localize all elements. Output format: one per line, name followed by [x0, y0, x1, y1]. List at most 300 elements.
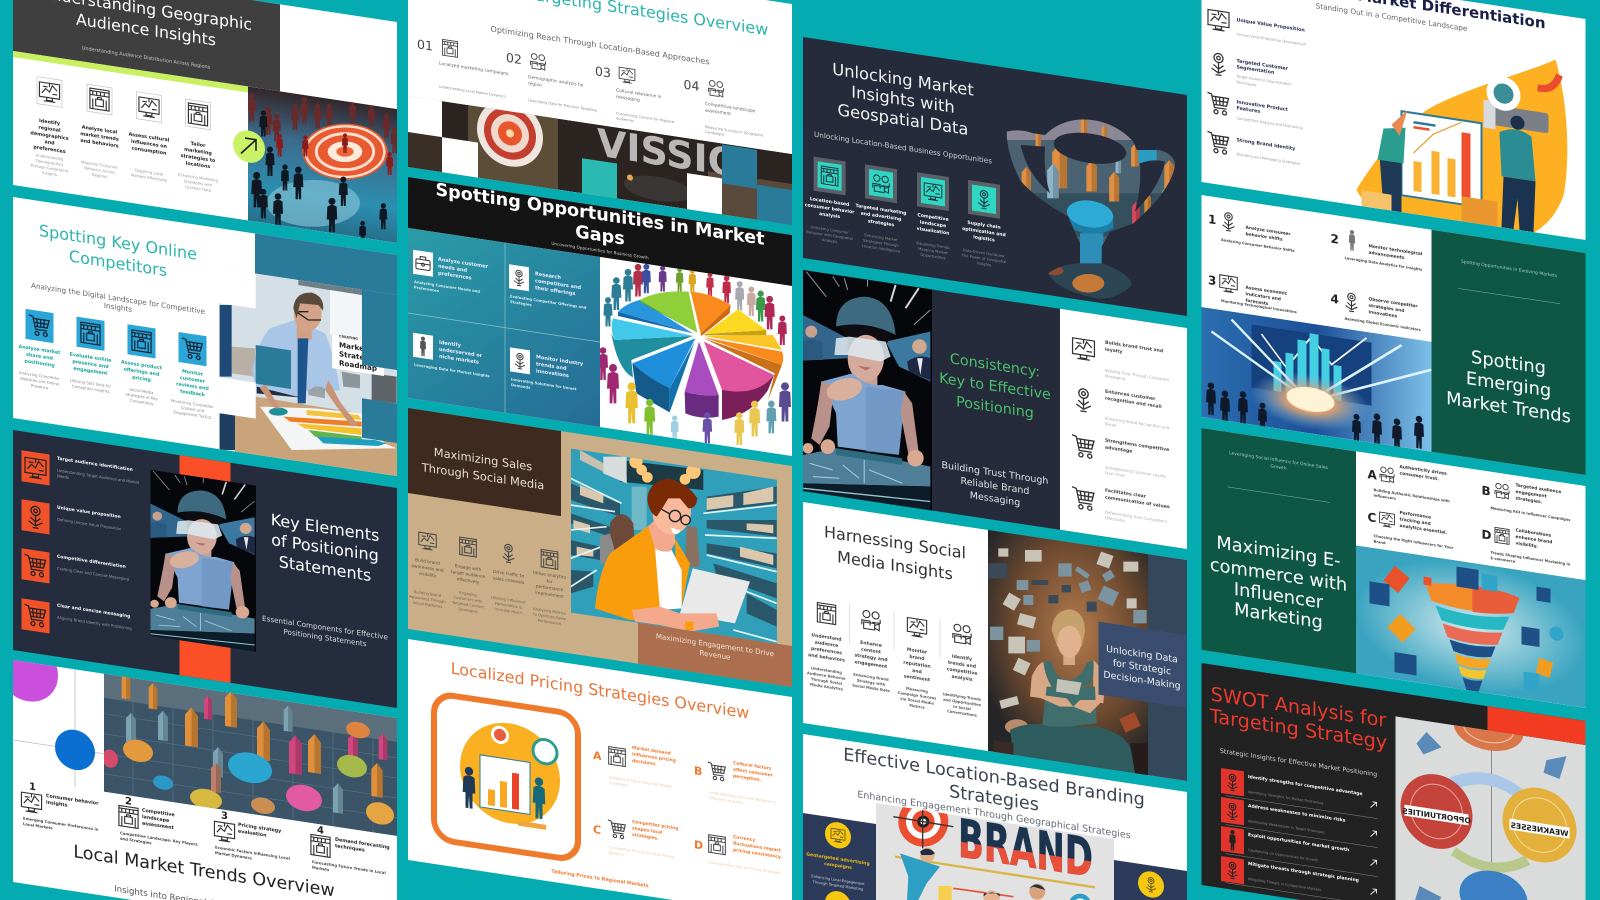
image: SWOT diagram: OPPORTUNITIES — [1402, 806, 1471, 826]
item 4: communication of values — [1105, 495, 1170, 510]
column 3: pricing — [132, 375, 151, 383]
column 3: Drive traffic to — [493, 569, 524, 580]
item B — [694, 754, 776, 810]
item 2: Monitor technological — [1368, 243, 1423, 257]
item 2 — [1221, 797, 1378, 848]
item 4: Facilitates clear — [1105, 488, 1147, 500]
title: Effective Location-Based Branding — [843, 745, 1145, 811]
column 2: Enhancing Brand — [853, 673, 889, 682]
column 1: Websites and Online — [20, 376, 60, 387]
cell 3: niche markets — [439, 354, 479, 366]
item 1: Identify strengths for competitive advantage — [1248, 774, 1363, 797]
column 4: Content and — [181, 405, 205, 413]
item D — [1482, 522, 1571, 572]
slide: Maximizing E-commerce with Influencer Marketing — [1202, 428, 1586, 708]
title: Media Insights — [837, 547, 953, 584]
cell 1: Analyzing Consumer Needs and — [414, 280, 480, 294]
item 1 — [1073, 335, 1169, 388]
column 1 — [807, 601, 846, 692]
item A — [1368, 459, 1450, 509]
item 4: Clear and concise messaging — [57, 603, 130, 620]
item A: Influencers — [1374, 493, 1396, 501]
title: Through Social Media — [421, 460, 544, 493]
item 2: Targeted Customer — [1236, 58, 1289, 72]
item C: C — [593, 823, 601, 837]
item 3: Monitoring Technological Innovations — [1221, 299, 1297, 314]
item 3: Exploit opportunities for market growth — [1248, 832, 1349, 853]
column 3: sentiment — [904, 673, 931, 683]
column 2: content — [861, 647, 882, 656]
item D: Collaborations — [1516, 527, 1552, 539]
column 4: for — [547, 578, 553, 585]
item 3: evaluation — [238, 828, 267, 839]
column 1: share and — [26, 352, 53, 362]
column 4: Strategies with — [184, 178, 213, 188]
column 2: Behavior Across — [84, 165, 115, 175]
item 3: Over Time — [1105, 470, 1125, 478]
slide: Geographic Targeting Strategies Overview — [408, 0, 792, 225]
item 03: messaging — [616, 94, 640, 104]
item A: Authenticity drives — [1400, 464, 1447, 477]
cell 3: Identify — [439, 340, 462, 349]
image: crowd around target — [248, 86, 397, 243]
column 3: Targeting Local — [134, 167, 163, 177]
column 1: Analyzing Competitor — [19, 370, 60, 381]
item 4: Strong Brand Identity — [1236, 137, 1296, 152]
column 2: and behaviors — [80, 138, 119, 150]
item B: affect consumer — [733, 767, 774, 779]
cell 4: Monitor industry — [536, 354, 584, 368]
column 3 — [129, 90, 170, 183]
item D: Currency — [733, 834, 755, 843]
item B: B — [1482, 483, 1491, 499]
item 3: Strengthens competitive — [1105, 438, 1169, 453]
slide: Strategies to Market Differentiation — [1202, 0, 1586, 240]
item 04: 04 — [684, 77, 699, 94]
panel: four cells — [408, 228, 600, 427]
cell 4 — [510, 347, 584, 398]
column 2: Strategies Through — [863, 239, 899, 248]
item 1: 1 — [29, 781, 36, 793]
column 3: and — [912, 668, 922, 675]
image: colored bars on circuit board — [104, 674, 397, 836]
image: woman with helmet — [800, 243, 935, 537]
item 4: Markets — [312, 865, 330, 872]
item 4: 4 — [317, 825, 324, 837]
column 2 — [70, 316, 112, 394]
column 4 — [961, 179, 1006, 270]
column 3: Increase Reach — [495, 607, 523, 615]
column 4: marketing — [184, 147, 212, 157]
cell 3: underserved or — [439, 347, 483, 359]
right item — [1121, 867, 1182, 900]
item 01 — [417, 35, 509, 99]
column 4: locations — [186, 161, 210, 170]
slide: Understanding Geographic Audience Insights — [13, 0, 399, 267]
item 2 — [22, 499, 122, 545]
green panel — [1202, 428, 1356, 673]
item 2: Competitive — [142, 808, 175, 819]
green panel: Marketing — [1234, 599, 1323, 633]
item C — [1368, 505, 1454, 556]
item 1: Local Markets — [23, 821, 53, 831]
item 1: Analyzing Consumer Behavior Shifts — [1221, 238, 1295, 253]
item D: D — [1482, 527, 1491, 543]
brand wordmark — [960, 818, 1092, 875]
column 4: Identify — [952, 654, 972, 663]
left item: Enhancing Local Engagement — [811, 874, 865, 886]
title: Key Elements — [271, 510, 379, 545]
cell 2 — [509, 264, 587, 315]
item 03: Audiences — [616, 116, 634, 123]
column 4: The Power of Geospatial — [961, 253, 1006, 264]
item 3: Market Dynamics — [215, 850, 253, 861]
item A: consumer trust. — [1400, 470, 1439, 482]
column 3: reputation — [903, 660, 931, 670]
column 4: competitive — [947, 666, 977, 677]
item 01: Localized marketing campaigns — [439, 61, 509, 77]
callout box: for Strategic — [1113, 658, 1171, 678]
title: Audience Insights — [76, 10, 216, 50]
column 1: Behavior with Geospatial — [806, 230, 853, 241]
column 4: Supply chain — [967, 220, 1001, 231]
title: Local Market Trends Overview — [73, 842, 335, 900]
column 2: engagement — [74, 366, 108, 377]
column 2: Engage with — [455, 563, 482, 573]
item 2: Leveraging Data Analytics for Insights — [1344, 256, 1422, 272]
green panel — [1432, 230, 1586, 475]
item 3: advantage — [1105, 445, 1132, 455]
item 1: Analyze consumer — [1246, 225, 1291, 238]
item 2: Addressing Weaknesses in Target Strategies — [1248, 819, 1325, 835]
column 2: Targeted Content — [451, 601, 485, 610]
column 4: trends and — [948, 660, 976, 670]
cell 4: innovations — [536, 368, 569, 379]
green panel: Influencer — [1234, 579, 1324, 613]
image: chart burst with crowd — [1202, 307, 1432, 452]
subtitle: Strategic Insights for Effective Market Positioning — [1220, 747, 1377, 779]
item C: Competitor pricing — [632, 819, 678, 832]
cell 3 — [413, 333, 490, 378]
title: SWOT Analysis for — [1211, 682, 1386, 732]
image: brand illustration — [876, 803, 1114, 900]
column 2: Enhancing Market — [864, 233, 898, 242]
item A: Market demand — [632, 745, 671, 757]
cell 4: Demands — [511, 383, 531, 390]
column 3: Opportunities — [920, 253, 946, 261]
column 1: audience — [815, 640, 838, 649]
item 1: loyalty — [1105, 347, 1123, 355]
column 3: Utilizing Influencer — [491, 596, 526, 605]
column 3 — [916, 172, 950, 261]
column 3 — [121, 323, 163, 408]
item 3: Competitive Analysis and Positioning — [1236, 116, 1303, 130]
card: roadmap sign: Market — [339, 340, 368, 354]
column 2: and advertising — [861, 211, 901, 223]
column 1: preferences — [811, 646, 842, 657]
title: Positioning — [956, 394, 1034, 422]
title: Harnessing Social — [824, 522, 966, 563]
item C: analytics essential. — [1400, 523, 1448, 536]
column 2: strategy and — [854, 652, 888, 663]
item 2: Segmentation — [1236, 64, 1275, 76]
column 1 — [29, 75, 69, 179]
item 2: Defining Unique Value Proposition — [57, 517, 122, 531]
item D: D — [694, 838, 703, 853]
slide: Consistency: Key to Effective Positioning — [800, 243, 1187, 575]
item 1 — [1221, 768, 1378, 819]
item 4: Differentiating from Competitors — [1105, 510, 1167, 524]
column 2 — [856, 163, 906, 255]
item B: perception. — [733, 773, 762, 783]
title: Spotting Key Online — [39, 221, 197, 264]
item D: visibility. — [1516, 540, 1538, 550]
item 2: 2 — [1330, 232, 1339, 247]
title: Maximizing Sales — [434, 445, 532, 474]
column 2: engagement — [855, 659, 888, 670]
item 4: Assessing Global Economic Indicators — [1344, 317, 1421, 332]
column 4: Data-Driven Decisions: — [963, 248, 1005, 259]
item B: strategies. — [1516, 495, 1543, 505]
column 4: Identifying Trends — [943, 692, 982, 702]
column 1: awareness and — [411, 563, 444, 574]
green panel: Spotting Opportunities in Evolving Markets — [1461, 259, 1558, 279]
title: Geospatial Data — [838, 100, 968, 139]
column 1: positioning — [24, 358, 55, 369]
item 2: Techniques — [1236, 80, 1257, 87]
left item: Geotargeted advertising — [806, 852, 870, 867]
column 2: Strategy with — [857, 679, 886, 687]
item 1: insights — [46, 800, 68, 809]
column 4: analysis — [951, 674, 973, 683]
column 1: preferences — [33, 144, 66, 155]
column 1: Media Analytics — [810, 683, 844, 692]
item 1: Identifying Strengths for Market Positioning — [1248, 790, 1323, 805]
column 2: Strategies — [459, 607, 477, 614]
item 2: landscape — [142, 814, 170, 824]
subtitle: Essential Components for Effective — [262, 614, 388, 642]
item 4: Demand forecasting — [335, 837, 390, 851]
column 1: visibility — [419, 571, 437, 579]
item C: Choosing the Right Influencers for Your — [1374, 534, 1454, 550]
column 1: Insights — [42, 170, 57, 177]
column 4: logistics — [973, 234, 995, 244]
image: SWOT diagram — [1396, 716, 1586, 900]
column 1: regional — [38, 125, 61, 134]
item 4 — [1208, 131, 1300, 166]
footer bar with subtitle: Maximizing Engagement to Drive — [656, 631, 774, 658]
item 3 — [1208, 273, 1297, 314]
title: Gaps — [575, 222, 625, 250]
item 04: Competitive landscape — [705, 101, 756, 114]
item 3: forecasts — [1246, 298, 1269, 307]
item C: Performance — [1400, 510, 1431, 521]
item 4 — [22, 597, 132, 646]
column 1: Identify — [39, 118, 61, 127]
item B: B — [694, 764, 702, 778]
item C: Competitive Pricing for Local Pricing — [609, 845, 674, 859]
cell 3: Leveraging Data for Market Insights — [414, 363, 490, 378]
title: Localized Pricing Strategies Overview — [451, 659, 749, 723]
item 2: and Strategies — [120, 836, 152, 846]
item 3 — [1221, 826, 1378, 877]
item 1: Consumer behavior — [46, 793, 99, 807]
item 4 — [1072, 483, 1170, 530]
green panel: Growth — [1270, 463, 1287, 472]
column 2: Regions — [92, 172, 107, 179]
image: 3D pie chart with people — [600, 257, 792, 456]
card: roadmap sign — [332, 333, 384, 376]
item 1: Target audience identification — [57, 456, 133, 473]
left item — [806, 817, 870, 900]
column 1: Analysis — [822, 238, 837, 244]
column 2: presence and — [72, 359, 109, 370]
column 2: Engaging — [459, 591, 477, 597]
cell 2: their offerings — [535, 285, 575, 297]
item 2: advancements — [1368, 250, 1405, 261]
item 4: Observe competitor — [1368, 296, 1418, 310]
footer bar with subtitle: Revenue — [700, 648, 730, 662]
column 4: Conversations — [947, 709, 978, 718]
column 3: Markets Effectively — [131, 172, 168, 183]
column 3: Campaign Success — [898, 691, 937, 701]
left item: Through Targeted Marketing — [812, 880, 863, 892]
slide: Unlocking Market Insights with Geospatial Data — [803, 37, 1187, 332]
item 3: Capitalizing on Opportunities for Growth — [1248, 848, 1318, 863]
item C: strategies. — [632, 832, 659, 842]
item 1: behavior shifts — [1246, 231, 1283, 243]
subtitle: Unlocking Location-Based Business Opportunities — [814, 130, 992, 166]
illustration: yellow leaf with chart board and people — [1356, 60, 1568, 232]
item 4: techniques — [335, 843, 365, 854]
column 2: market trends — [80, 131, 119, 143]
item 3: Competitive differentiation — [57, 554, 126, 570]
column 4: in Social — [953, 705, 971, 711]
column 2: Location Intelligence — [862, 244, 901, 254]
column 3: via Social Media — [900, 697, 934, 706]
subtitle: Reliable Brand — [961, 476, 1029, 497]
column 1: analysis — [819, 211, 840, 220]
image: SWOT diagram: WEAKNESSES — [1510, 821, 1569, 838]
subtitle: Analyzing the Digital Landscape for Competitive — [31, 281, 205, 316]
trophy silhouette with image — [1006, 119, 1175, 298]
item 2 — [1330, 227, 1423, 272]
item 2: recognition and recall — [1105, 396, 1162, 410]
item D: Cultural Influences on Pricing Strategies — [709, 860, 781, 875]
item B: Targeted audience — [1516, 482, 1561, 495]
column 1: Social Platforms — [413, 601, 442, 609]
column 2: strategies — [868, 218, 894, 228]
item A: A — [593, 749, 602, 763]
slide: Local Market Trends Overview — [0, 637, 397, 900]
green panel: commerce with — [1210, 554, 1347, 596]
item A: Building Authentic Relationships with — [1374, 488, 1450, 504]
item 04: Measuring Success in Geographic — [705, 125, 764, 138]
column 3 — [898, 616, 937, 712]
cell 2: competitors and — [535, 278, 581, 291]
item B — [1482, 477, 1570, 522]
item 3: Innovative Product — [1236, 99, 1288, 113]
callout box — [1098, 622, 1187, 708]
column 4 — [533, 548, 567, 627]
column 2: Competitor Insights — [72, 383, 109, 394]
column 3: Partnerships to — [495, 602, 523, 610]
decorative circles — [13, 660, 104, 788]
item 02: region — [528, 81, 542, 89]
item C: shapes local — [632, 825, 663, 836]
item 3: indicators and — [1246, 291, 1281, 302]
item B: Different Locations — [709, 796, 743, 805]
item 02: Demographic analysis by — [528, 74, 584, 89]
column 1: Understand — [811, 632, 842, 643]
column 4 — [943, 622, 982, 718]
subtitle: Optimizing Reach Through Location-Based Approaches — [491, 25, 709, 67]
item A — [593, 739, 676, 795]
item 1: Messaging — [1105, 373, 1126, 381]
column 3: Strategies of Key — [125, 391, 158, 401]
item 02: Leveraging Data for Precision Targeting — [528, 98, 597, 112]
column 3 — [491, 542, 526, 616]
item C: Benefits — [609, 851, 624, 857]
item C: Brand — [1374, 539, 1386, 545]
item A: influences pricing — [632, 751, 676, 764]
item 1: Unique Value Proposition Development — [1236, 32, 1307, 47]
column 3: landscape — [920, 219, 946, 229]
item B: Measuring ROI in Influencer Campaigns — [1490, 506, 1570, 522]
cell 2: Strategies — [510, 300, 532, 307]
column 4: reviews and — [176, 381, 209, 392]
item A: Adapting Prices to Regional Market — [609, 775, 672, 789]
column 2: Enhance — [860, 640, 882, 649]
column 4 — [171, 331, 214, 420]
image: woman with helmet — [148, 449, 259, 672]
item 1: Unique Value Proposition — [1236, 17, 1305, 34]
column 2: Evaluate online — [70, 352, 112, 364]
item D: E-commerce — [1490, 556, 1516, 564]
column 1 — [409, 531, 446, 610]
item 4: innovations — [1368, 309, 1398, 320]
cell 1: Analyze customer — [438, 257, 489, 270]
subtitle: Uncovering Opportunities for Business Growth — [551, 241, 649, 260]
item 03: 03 — [595, 63, 611, 81]
item 3 — [1072, 433, 1169, 485]
column 1: Awareness Through — [409, 595, 446, 604]
item 4: Aligning Brand Identity with Positioning — [57, 615, 132, 631]
slide: Spotting Key Online Competitors — [13, 173, 415, 518]
item 4 — [311, 824, 390, 881]
column 2: Mapping Consumer — [81, 159, 118, 170]
item D: Trends Shaping Influencer Marketing in — [1490, 551, 1571, 567]
item B: Cultural factors — [733, 760, 772, 772]
item 4: Effectively — [1105, 515, 1126, 523]
callout box: Unlocking Data — [1106, 644, 1178, 666]
item 2: Recall — [1105, 421, 1116, 428]
item 2: Enhancing Brand Recognition and — [1105, 416, 1170, 430]
cell 2: Research — [535, 271, 561, 281]
column 3: Measuring — [906, 687, 928, 694]
item 4: Mitigating Threats in Competitive Markets — [1248, 877, 1321, 892]
item 2: Unique value proposition — [57, 505, 121, 520]
slide: Localized Pricing Strategies Overview — [408, 639, 792, 900]
column 3: influences on — [131, 139, 168, 150]
item 04: Campaigns — [705, 130, 725, 137]
slide: Harnessing Social Media Insights — [803, 495, 1187, 813]
column 1: Location-based — [810, 196, 849, 208]
item 4 — [1221, 856, 1378, 900]
column 1: consumer behavior — [805, 202, 855, 216]
title: Unlocking Market — [832, 60, 974, 100]
column 1 — [805, 155, 855, 247]
